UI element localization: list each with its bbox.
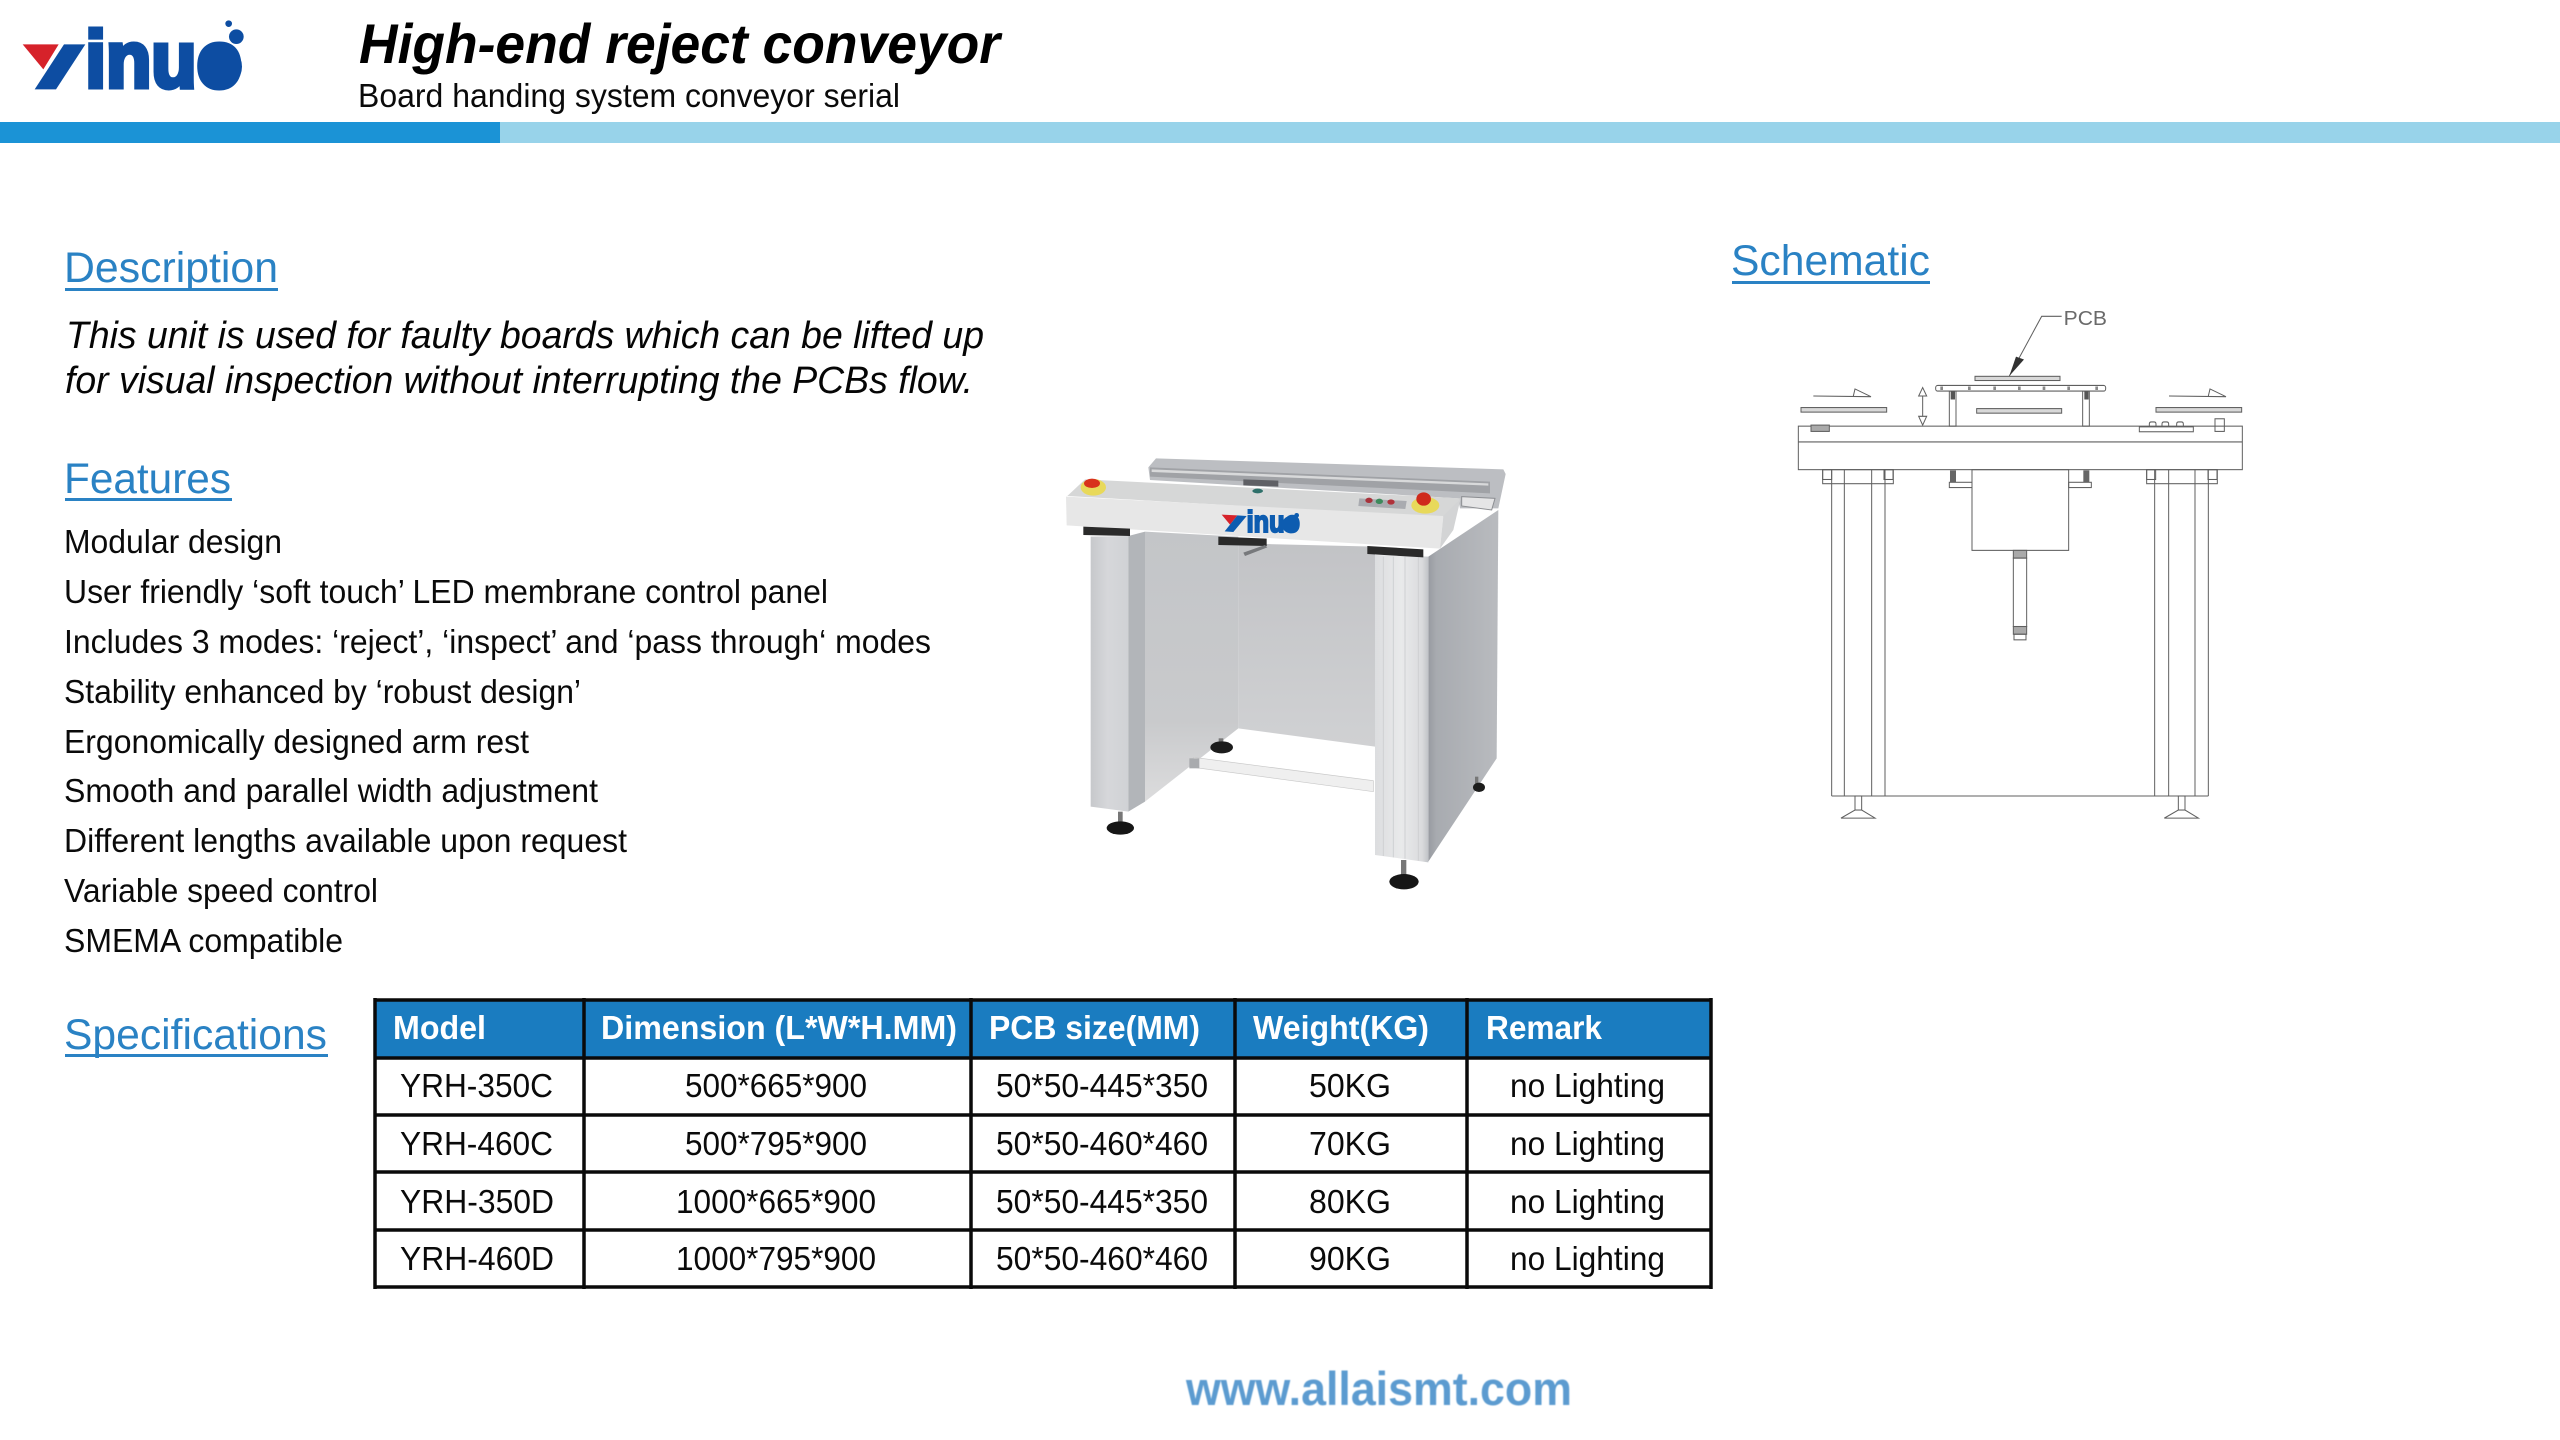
table row: YRH-350C: 50KG: [1309, 1067, 1391, 1104]
conveyor frame: [1798, 426, 2242, 470]
table row: YRH-350D: YRH-350D: [400, 1183, 554, 1220]
features list: Smooth and parallel width adjustment: [64, 772, 598, 809]
leader arrow: [2009, 316, 2062, 376]
description text: This unit is used for faulty boards which can be lifted up: [66, 315, 984, 357]
table header labels: [393, 1009, 1603, 1046]
table row: YRH-460C: YRH-460C: [400, 1125, 553, 1162]
table header labels: Weight(KG): [1253, 1009, 1429, 1046]
front face: [1066, 497, 1443, 549]
specifications table: [375, 998, 1711, 1289]
right e-stop: [1411, 492, 1439, 514]
features list: Stability enhanced by ‘robust design’: [64, 673, 581, 710]
right side panel: [1428, 510, 1498, 862]
cross bar: [1189, 757, 1373, 792]
features list: Different lengths available upon request: [64, 822, 627, 859]
PCB label: PCB: [2064, 308, 2107, 330]
right leg: [2155, 470, 2208, 796]
schematic drawing: [1798, 308, 2242, 818]
table row: YRH-460D: 1000*795*900: [676, 1240, 876, 1277]
table row: YRH-350C: 500*665*900: [685, 1067, 867, 1104]
table row: YRH-350C: YRH-350C: [400, 1067, 553, 1104]
lift plate: [1936, 385, 2106, 391]
frame fittings: [1811, 419, 2224, 432]
footer website: www.allaismt.com: [1185, 1362, 1572, 1415]
table header labels: Model: [393, 1009, 486, 1046]
table header labels: Remark: [1486, 1009, 1603, 1046]
machine logo: inuo: [1247, 505, 1300, 539]
header logo: yinuo: [23, 15, 244, 104]
rear foot right: [1473, 777, 1485, 792]
inner side panel: [1145, 532, 1238, 802]
product photo: conveyor machine: [1066, 458, 1506, 889]
flow arrow right: [2169, 389, 2226, 397]
table header labels: Dimension (L*W*H.MM): [601, 1009, 957, 1046]
features list: SMEMA compatible: [64, 922, 343, 959]
logo slanted stroke: [35, 44, 85, 89]
left e-stop: [1081, 479, 1106, 496]
features list: Modular design: [64, 523, 282, 560]
logo wordmark: inuo: [85, 15, 242, 104]
pcb boards: [1801, 376, 2242, 413]
black pads: [1083, 527, 1423, 557]
table row: YRH-460C: 70KG: [1309, 1125, 1391, 1162]
lift posts: [1949, 391, 2089, 426]
rear rail: [1148, 458, 1506, 510]
flow arrow left: [1813, 389, 1871, 397]
table row: YRH-350D: [400, 1183, 1665, 1220]
leg brackets: [1823, 470, 2217, 484]
table row: YRH-460D: YRH-460D: [400, 1240, 554, 1277]
lift double arrow: [1919, 388, 1927, 425]
table row: YRH-460D: no Lighting: [1510, 1240, 1665, 1277]
features list: [64, 523, 931, 959]
description text: for visual inspection without interrupting the PCBs flow.: [65, 360, 973, 402]
table row: YRH-460D: [400, 1240, 1665, 1277]
base line: [1832, 794, 2208, 797]
logo red triangle: [23, 44, 59, 69]
machine logo: [1222, 505, 1300, 539]
left front foot: [1107, 812, 1134, 835]
heading: Schematic: Schematic: [1731, 237, 1930, 285]
description text: [65, 315, 984, 402]
table row: YRH-350C: 50*50-445*350: [996, 1067, 1208, 1104]
features list: Includes 3 modes: ‘reject’, ‘inspect’ and ‘pass through‘ modes: [64, 623, 931, 660]
features list: User friendly ‘soft touch’ LED membrane control panel: [64, 573, 828, 610]
table row: YRH-350D: 50*50-445*350: [996, 1183, 1208, 1220]
back panel: [1238, 543, 1375, 747]
small green indicator: [1252, 489, 1263, 493]
right foot: [2164, 796, 2198, 818]
table header labels: PCB size(MM): [989, 1009, 1200, 1046]
cylinder: [2013, 550, 2027, 640]
left leg: [1832, 470, 1885, 796]
heading: Description: Description: [64, 244, 278, 292]
heading: Features: Features: [64, 455, 231, 503]
table row: YRH-350D: no Lighting: [1510, 1183, 1665, 1220]
table row: YRH-460D: 50*50-460*460: [996, 1240, 1208, 1277]
rear foot left: [1210, 738, 1233, 753]
heading: Specifications: Specifications: [64, 1011, 327, 1059]
table row: YRH-350D: 80KG: [1309, 1183, 1391, 1220]
table row: YRH-460C: [400, 1125, 1665, 1162]
header bar: [0, 122, 2560, 143]
subtitle: Board handing system conveyor serial: [358, 77, 900, 114]
title: High-end reject conveyor: [359, 12, 1003, 75]
table row: YRH-460C: 50*50-460*460: [996, 1125, 1208, 1162]
end cap: [1440, 498, 1461, 549]
lift box: [1949, 470, 2091, 550]
top deck: [1067, 479, 1461, 517]
features list: Ergonomically designed arm rest: [64, 723, 529, 760]
table row: YRH-460C: no Lighting: [1510, 1125, 1665, 1162]
logo bubbles: [198, 20, 244, 89]
table row: YRH-460C: 500*795*900: [685, 1125, 867, 1162]
table row: YRH-460D: 90KG: [1309, 1240, 1391, 1277]
table row: YRH-350C: [400, 1067, 1665, 1104]
table row: YRH-350C: no Lighting: [1510, 1067, 1665, 1104]
table header row: [375, 999, 1711, 1058]
left leg: [1091, 532, 1145, 812]
table row: YRH-350D: 1000*665*900: [676, 1183, 876, 1220]
control panel: [1358, 498, 1407, 509]
right leg: [1375, 555, 1428, 862]
features list: Variable speed control: [64, 872, 378, 909]
right front foot: [1389, 860, 1419, 889]
table grid: [375, 998, 1711, 1289]
left foot: [1841, 796, 1875, 818]
